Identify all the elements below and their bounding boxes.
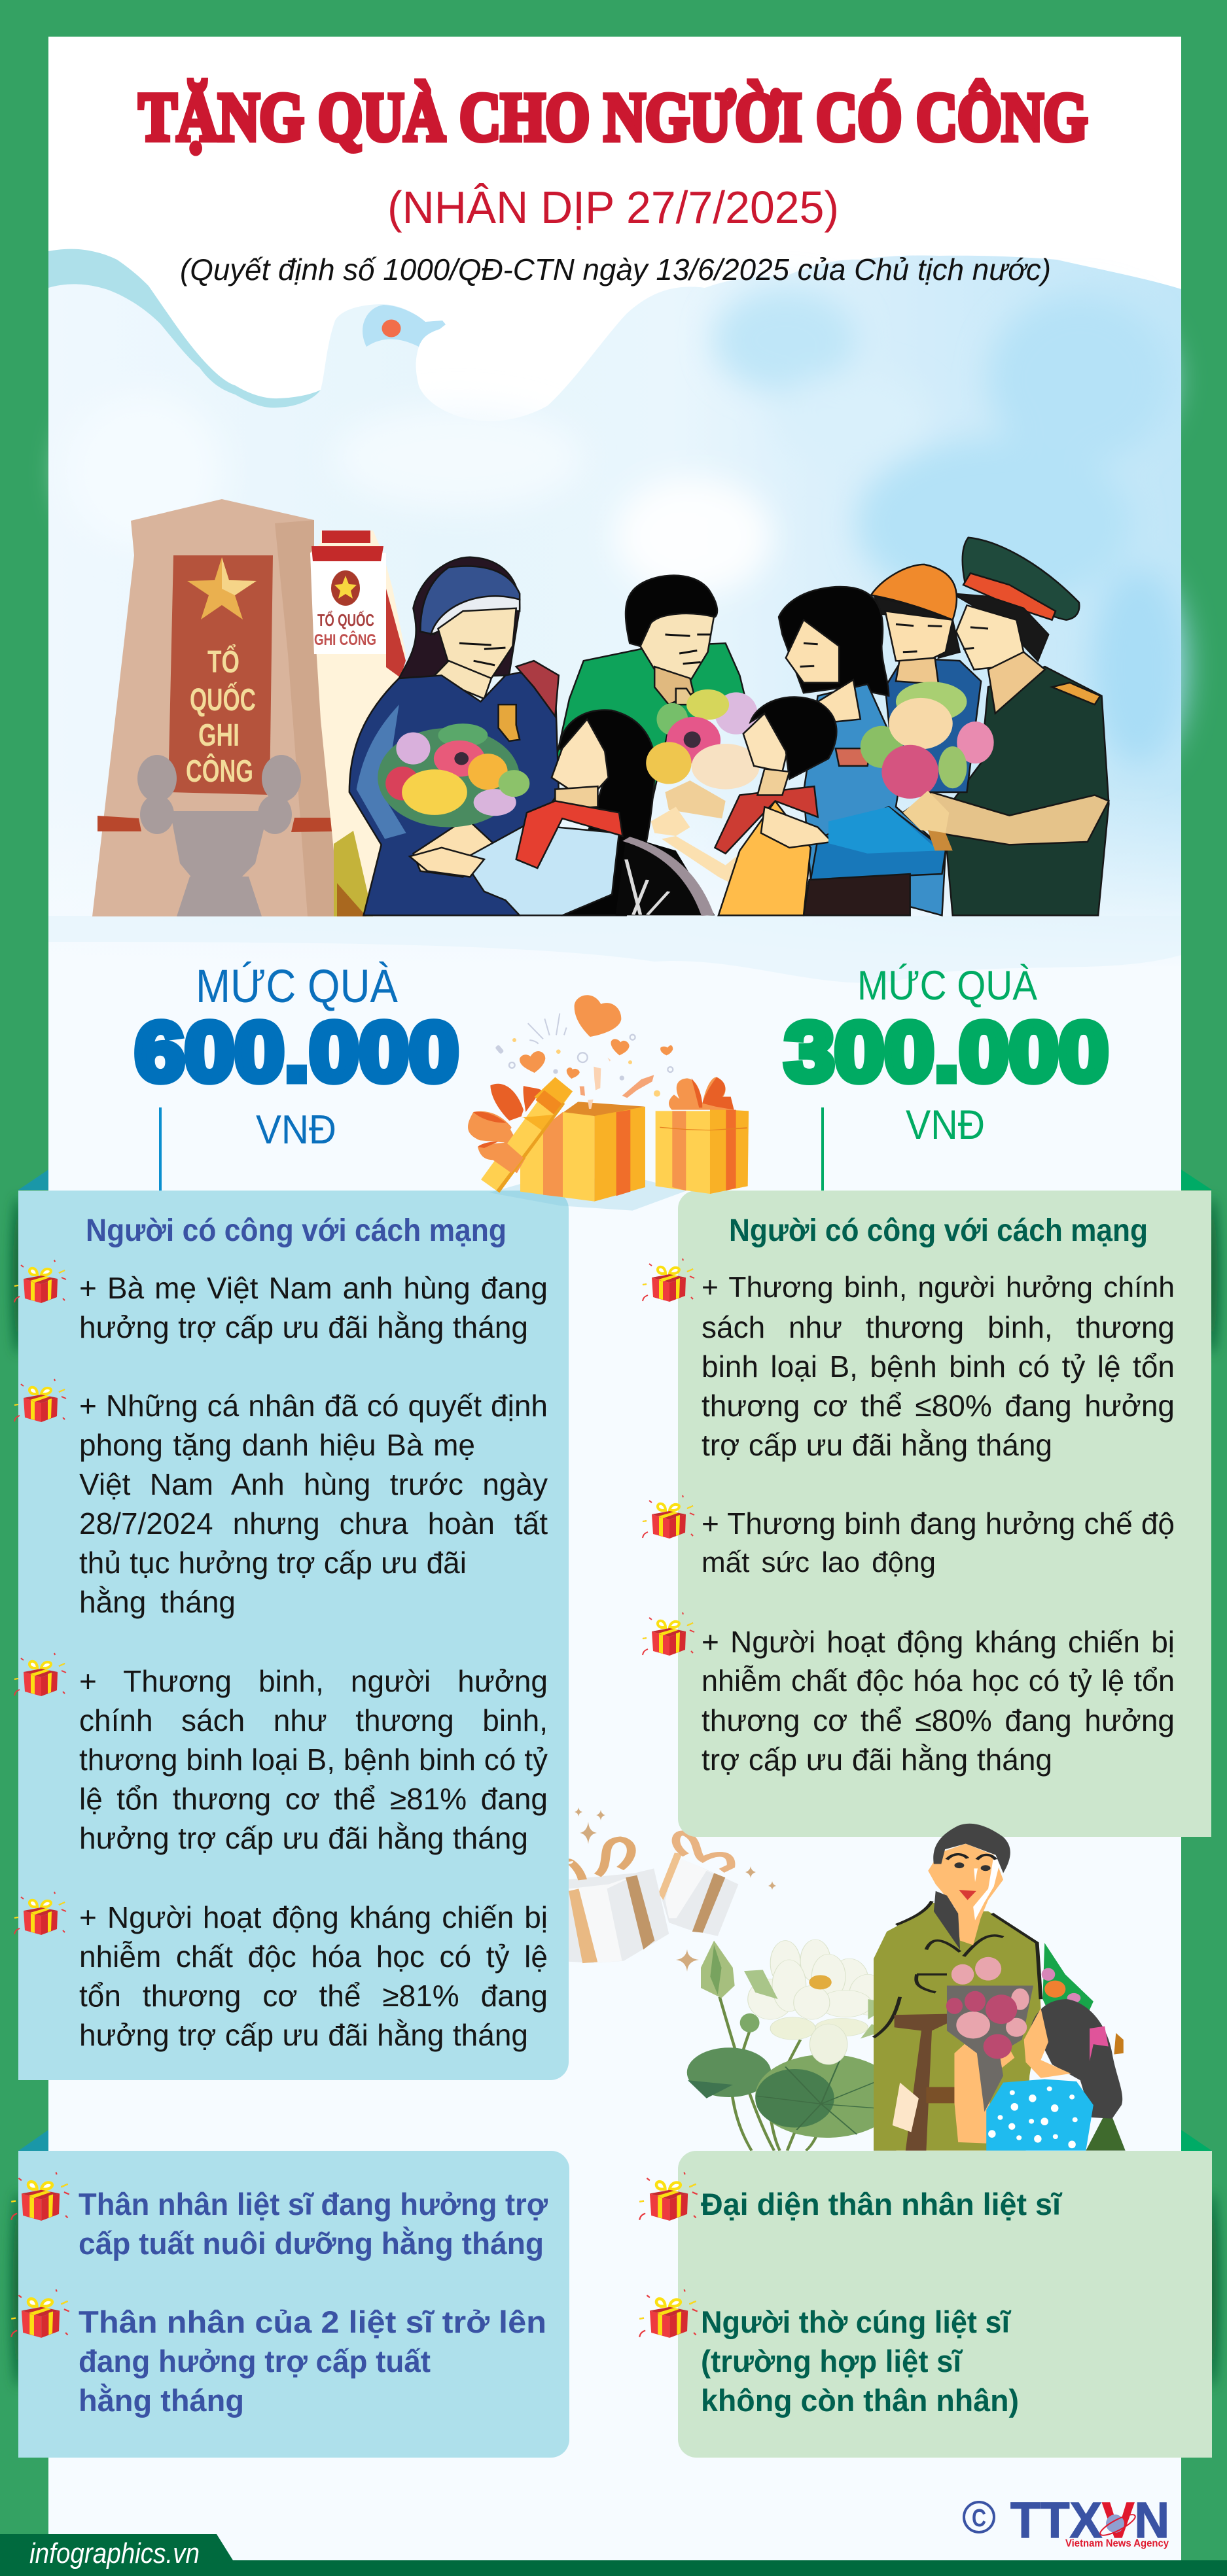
man in green — [555, 576, 747, 822]
list item: thương binh mất sức lao động: mất sức lao động — [702, 1546, 936, 1578]
worker — [871, 565, 981, 792]
list item: thương binh từ 81%: lệ tổn thương cơ thể ≥81% đang — [79, 1782, 548, 1816]
panel text — [79, 2187, 548, 2418]
list item: thân nhân của 2 liệt sĩ: Thân nhân của 2 liệt sĩ trở lên — [79, 2305, 546, 2339]
illustration: lotus — [687, 1940, 898, 2151]
list item: thương binh mất sức lao động: + Thương binh đang hưởng chế độ — [702, 1506, 1175, 1540]
list item: cá nhân đã có quyết định phong tặng: + Những cá nhân đã có quyết định — [79, 1389, 548, 1423]
list item: thương binh đến 80%: binh loại B, bệnh binh có tỷ lệ tổn — [702, 1349, 1175, 1384]
list item: người nhiễm chất độc hóa học đến 80%: + Người hoạt động kháng chiến bị — [702, 1625, 1175, 1659]
illustration: monument stele — [92, 499, 342, 916]
icon: gift — [639, 2172, 698, 2221]
icon: gift — [642, 1495, 695, 1539]
panel: 600.000 VND, martyrs' relatives — [18, 2151, 569, 2458]
icon: gift — [642, 1612, 695, 1656]
soldier — [903, 538, 1109, 915]
list item: cá nhân đã có quyết định phong tặng: hằng tháng — [79, 1585, 236, 1619]
list item: cá nhân đã có quyết định phong tặng: Việt Nam Anh hùng trước ngày — [79, 1467, 548, 1501]
icon: gift — [10, 2172, 69, 2221]
illustration: second memorial: TỔ QUỐC — [317, 610, 374, 630]
list item: thương binh từ 81%: chính sách như thương binh, — [79, 1703, 548, 1737]
icon: gift — [10, 2289, 69, 2338]
list item: người thờ cúng: (trường hợp liệt sĩ — [701, 2344, 963, 2378]
sky and dove background — [48, 256, 1184, 1027]
list item: cá nhân đã có quyết định phong tặng: 28/7/2024 nhưng chưa hoàn tất — [79, 1506, 548, 1540]
amount value: 600.000: 600.000 — [135, 1005, 459, 1099]
source: infographics.vn: infographics.vn — [29, 2537, 200, 2569]
panel fold triangles — [18, 1170, 1212, 2151]
amount label: left: MỨC QUÀ — [196, 961, 399, 1013]
mother's bouquet — [378, 723, 529, 827]
list item: thương binh đến 80% — [702, 1272, 1175, 1462]
illustration: central gift boxes and hearts — [468, 995, 749, 1211]
floating white gift boxes — [519, 1833, 738, 1963]
list item: người thờ cúng: Người thờ cúng liệt sĩ — [701, 2305, 1012, 2339]
subtitle: (NHÂN DỊP 27/7/2025) — [387, 182, 839, 233]
list item: cá nhân đã có quyết định phong tặng — [79, 1389, 548, 1619]
list item: người nhiễm chất độc hóa học từ 81%: + Người hoạt động kháng chiến bị — [79, 1900, 548, 1934]
illustration: second memorial: GHI CÔNG — [314, 631, 376, 649]
panel text — [678, 2151, 1212, 2458]
list item: thương binh đến 80%: thương cơ thể ≤80% đang hưởng — [702, 1389, 1175, 1423]
logo: TTXVN: TTXVN — [1010, 2492, 1169, 2549]
amount label: right: MỨC QUÀ — [857, 963, 1037, 1009]
list item: người nhiễm chất độc hóa học đến 80%: thương cơ thể ≤80% đang hưởng — [702, 1703, 1175, 1737]
amount value: 300.000: 300.000 — [785, 1005, 1109, 1099]
mother — [349, 557, 559, 915]
illustration: monument stele: QUỐC — [190, 682, 256, 718]
woman — [779, 587, 946, 915]
man's bouquet — [646, 689, 764, 892]
list item: thương binh từ 81%: hưởng trợ cấp ưu đãi hằng tháng — [79, 1821, 528, 1855]
list item: cá nhân đã có quyết định phong tặng: thủ tục hưởng trợ cấp ưu đãi — [79, 1546, 467, 1580]
list item: người thờ cúng — [701, 2305, 1019, 2418]
illustration: group of people with flowers — [349, 538, 1109, 915]
illustration: second memorial — [310, 531, 406, 916]
boy — [715, 697, 836, 915]
icon: gift — [14, 1652, 67, 1696]
dove eye — [382, 319, 400, 338]
list item: thương binh từ 81%: thương binh loại B, bệnh binh có tỷ — [79, 1743, 548, 1777]
dove tail band — [48, 249, 321, 408]
list item: cá nhân đã có quyết định phong tặng: phong tặng danh hiệu Bà mẹ — [79, 1428, 475, 1462]
illustration: veteran with crutch and girl with bouquet — [874, 1824, 1126, 2151]
footer bar and source tab — [0, 2534, 1227, 2576]
icon: gift — [642, 1259, 695, 1302]
panel heading: Người có công với cách mạng — [86, 1213, 507, 1248]
wheelchair — [616, 836, 715, 915]
panel heading: Người có công với cách mạng — [729, 1213, 1148, 1248]
list item: thương binh đến 80%: trợ cấp ưu đãi hằng tháng — [702, 1428, 1052, 1462]
panel: recipients of 600.000 VND — [18, 1191, 569, 2080]
list item: người nhiễm chất độc hóa học từ 81%: nhiễm chất độc hóa học có tỷ lệ — [79, 1940, 548, 1974]
list item: thương binh đến 80%: sách như thương binh, thương — [702, 1310, 1175, 1344]
list item: thân nhân của 2 liệt sĩ — [79, 2305, 546, 2418]
icon: gift — [14, 1379, 67, 1422]
list item: thương binh từ 81%: + Thương binh, người hưởng — [79, 1664, 548, 1698]
list item: người nhiễm chất độc hóa học từ 81% — [79, 1900, 548, 2052]
soldier's bouquet — [861, 682, 994, 850]
list item: thân nhân liệt sĩ — [79, 2187, 548, 2261]
list item: thương binh từ 81% — [79, 1664, 548, 1855]
list item: người nhiễm chất độc hóa học đến 80%: trợ cấp ưu đãi hằng tháng — [702, 1743, 1052, 1777]
currency: right: VNĐ — [906, 1102, 985, 1148]
panel: recipients of 300.000 VND — [678, 1191, 1211, 1837]
icon: gift — [14, 1892, 67, 1935]
list item: thân nhân của 2 liệt sĩ: đang hưởng trợ cấp tuất — [79, 2344, 431, 2378]
decision reference line: (Quyết định số 1000/QĐ-CTN ngày 13/6/2025 của Chủ tịch nước) — [180, 252, 1051, 287]
currency: left: VNĐ — [256, 1107, 336, 1153]
list item: thương binh mất sức lao động — [702, 1506, 1175, 1578]
sparkles — [575, 1807, 776, 1972]
list item: người nhiễm chất độc hóa học đến 80% — [702, 1625, 1175, 1777]
list item: Bà mẹ Việt Nam anh hùng: hưởng trợ cấp ưu đãi hằng tháng — [79, 1310, 528, 1344]
panel side shadows — [12, 1197, 1218, 2388]
icon: gift — [638, 2285, 711, 2344]
list item: thân nhân liệt sĩ: cấp tuất nuôi dưỡng hằng tháng — [79, 2226, 544, 2261]
logo: TTXVN: C — [972, 2505, 986, 2532]
illustration: monument stele: TỔ — [207, 644, 240, 680]
list item: người thờ cúng: không còn thân nhân) — [701, 2383, 1019, 2418]
panel: 300.000 VND, martyrs' representatives — [678, 2151, 1212, 2458]
list item: thân nhân liệt sĩ: Thân nhân liệt sĩ đang hưởng trợ — [79, 2187, 548, 2221]
illustration: monument stele: GHI — [198, 718, 240, 753]
list item: người nhiễm chất độc hóa học đến 80%: nhiễm chất độc hóa học có tỷ lệ tổn — [702, 1664, 1175, 1697]
icon: gift — [14, 1260, 67, 1303]
list item: Bà mẹ Việt Nam anh hùng — [79, 1271, 548, 1344]
woman's sleeve — [828, 807, 938, 854]
list item: thương binh đến 80%: + Thương binh, người hưởng chính — [702, 1272, 1175, 1304]
list item: người nhiễm chất độc hóa học từ 81%: tổn thương cơ thể ≥81% đang — [79, 1979, 548, 2013]
logo: TTXVN: Vietnam News Agency — [1065, 2538, 1169, 2549]
list item: thân nhân của 2 liệt sĩ: hằng tháng — [79, 2383, 244, 2418]
list item: đại diện thân nhân: Đại diện thân nhân liệt sĩ — [701, 2187, 1063, 2221]
list item: người nhiễm chất độc hóa học từ 81%: hưởng trợ cấp ưu đãi hằng tháng — [79, 2018, 528, 2052]
illustration: monument stele: CÔNG — [186, 753, 253, 789]
list item: Bà mẹ Việt Nam anh hùng: + Bà mẹ Việt Nam anh hùng đang — [79, 1271, 548, 1305]
girl with red scarf — [410, 710, 655, 915]
